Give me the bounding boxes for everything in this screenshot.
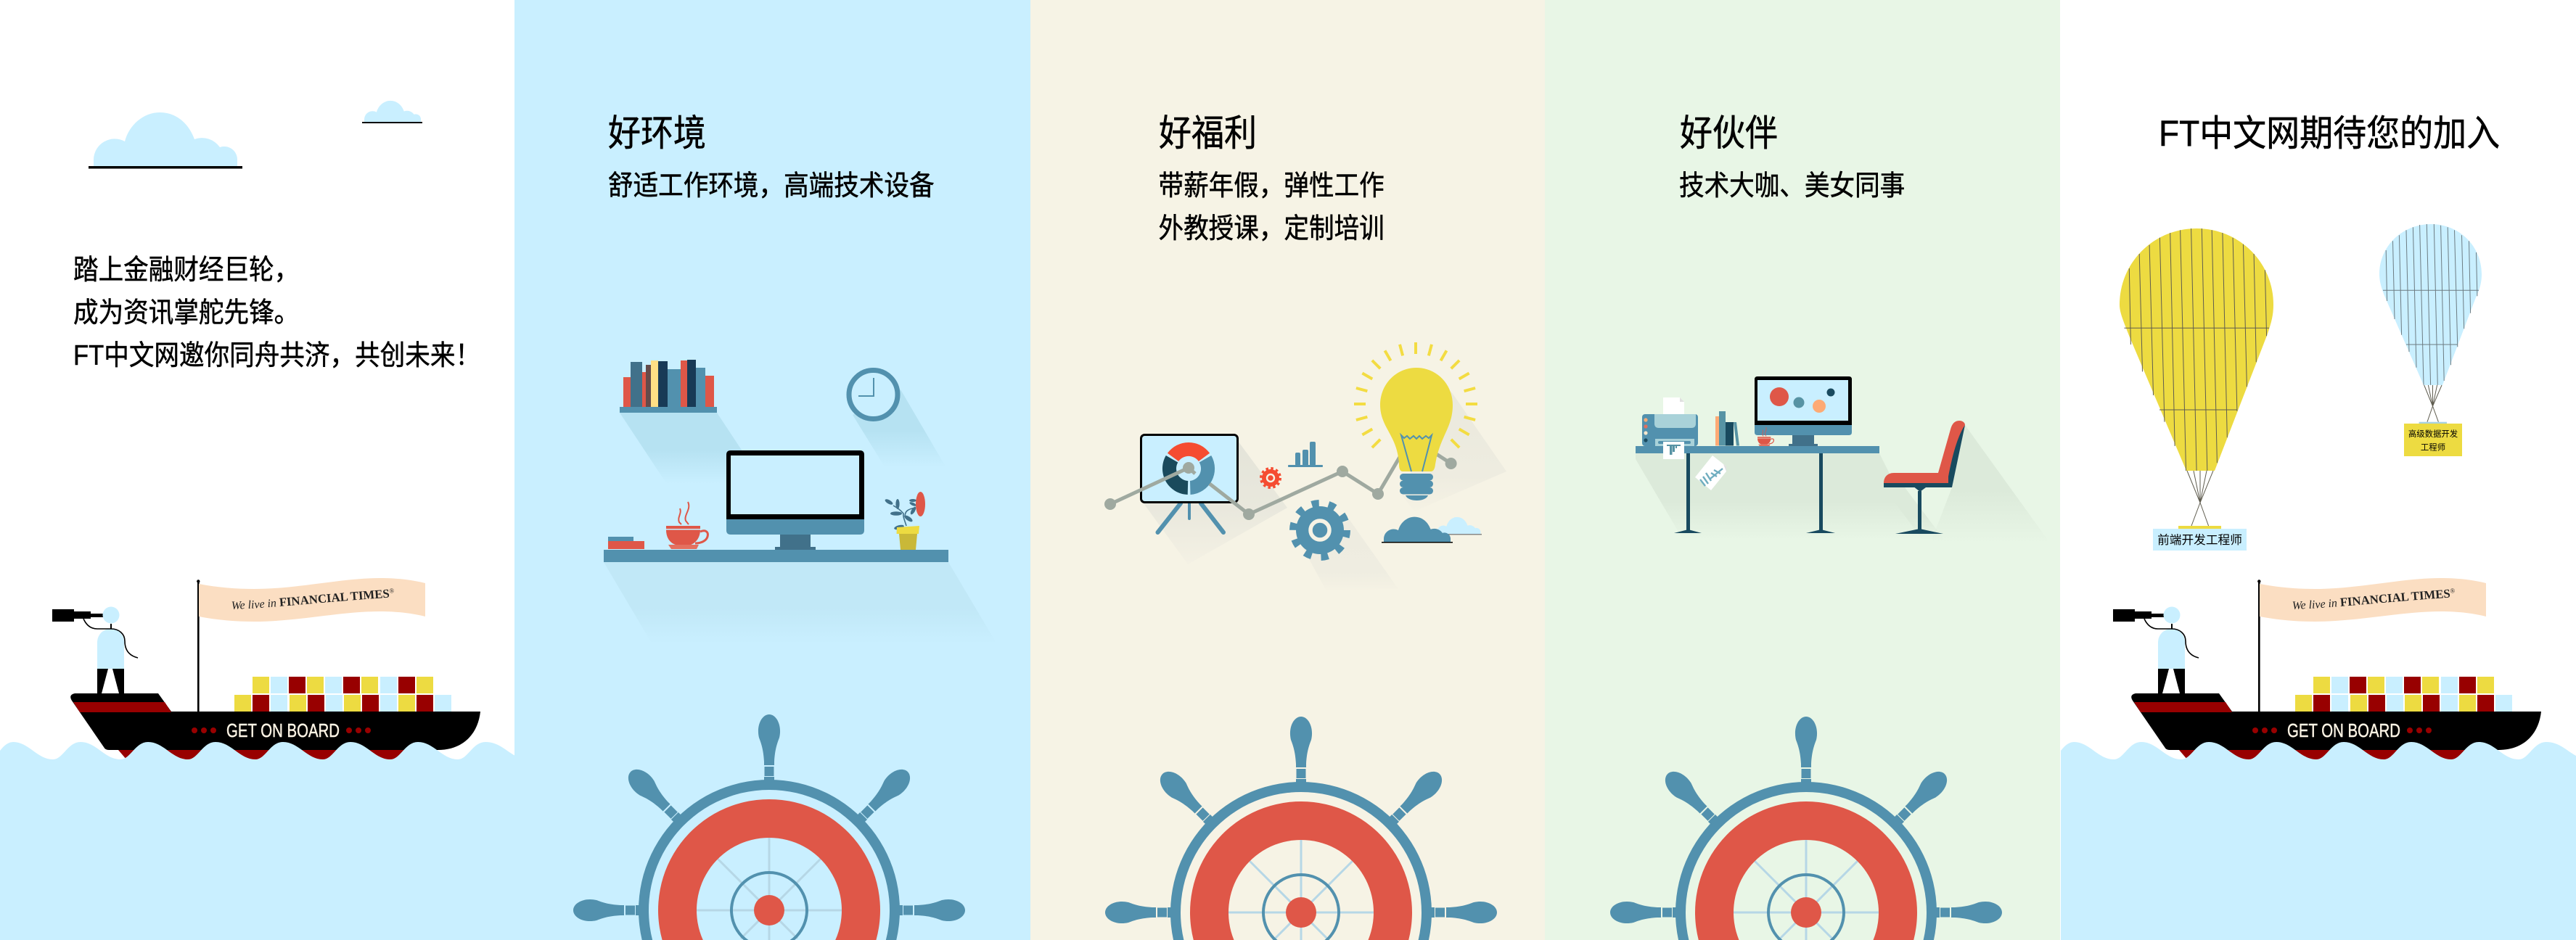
- shadows: [1144, 392, 1506, 590]
- panel: join us: [2061, 113, 2576, 940]
- label: senior data engineer: 工程师: [2421, 442, 2445, 453]
- panel: good benefits: [1030, 0, 1545, 940]
- icon: office chair: [1884, 421, 1965, 534]
- flag banner: [199, 578, 425, 622]
- flag banner: ®: [389, 588, 394, 593]
- ship hull: GET ON BOARD: [226, 720, 340, 741]
- heading: 好环境: [608, 114, 706, 154]
- icon: small red gear: [1261, 469, 1280, 487]
- icon: large teal gear: [1293, 503, 1347, 557]
- text block: invitation: FT中文网邀你同舟共济，共创未来！: [73, 339, 480, 371]
- icon: lookout with telescope: [52, 606, 138, 693]
- subtitle: 带薪年假，弹性工作: [1158, 170, 1385, 201]
- shadows: [604, 389, 998, 646]
- cargo containers: [234, 677, 451, 712]
- label: senior data engineer: 高级数据开发: [2408, 429, 2458, 439]
- subtitle: [1158, 170, 1385, 244]
- heading: 好伙伴: [1680, 114, 1778, 154]
- illustration: cargo ship with lookout: [52, 578, 480, 759]
- sea waves: [0, 742, 515, 940]
- subtitle: 外教授课，定制培训: [1158, 213, 1385, 244]
- panel: good environment: [514, 0, 1030, 940]
- icon: wall clock: [849, 370, 898, 419]
- icon: bookshelf: [620, 360, 717, 413]
- panel: good partners: [1545, 0, 2060, 940]
- cargo containers: [2295, 677, 2512, 712]
- icon: presentation board with pie chart: [1141, 435, 1238, 502]
- label: senior data engineer: [2404, 424, 2462, 456]
- icon: stacked books: [608, 537, 644, 549]
- icon: ship wheel: [1610, 717, 2002, 940]
- icon: ship wheel: [573, 714, 965, 940]
- icon: presentation tripod: [1158, 503, 1223, 532]
- icon: small coffee cup: [1757, 427, 1773, 446]
- icon: ship wheel: [1105, 717, 1497, 940]
- heading: 好福利: [1159, 114, 1257, 154]
- subtitle: 舒适工作环境，高端技术设备: [608, 170, 935, 201]
- icon: light bulb: [1354, 342, 1477, 500]
- icon: falling paper: [1695, 455, 1726, 490]
- desk: [1636, 446, 1879, 533]
- ship hull: [70, 693, 480, 760]
- panel: intro: [0, 100, 514, 940]
- flag banner: We live in FINANCIAL TIMES: [232, 589, 389, 609]
- flag banner: ®: [2450, 588, 2455, 593]
- text block: invitation: 踏上金融财经巨轮，: [73, 254, 299, 285]
- text block: invitation: 成为资讯掌舵先锋。: [73, 297, 299, 328]
- ship hull: GET ON BOARD: [2287, 720, 2400, 741]
- icon: monitor with dots: [1755, 376, 1852, 446]
- icon: printer: [1642, 397, 1698, 459]
- icon: mini bar chart: [1288, 442, 1323, 467]
- label: front-end engineer: [2153, 529, 2247, 551]
- sea waves: [2061, 742, 2576, 940]
- icon: mast: [2257, 580, 2261, 712]
- icon: pair of clouds: [1382, 517, 1482, 543]
- flag banner: We live in FINANCIAL TIMES: [2293, 589, 2450, 609]
- icon: lookout with telescope: [2113, 606, 2199, 693]
- shadows: [1636, 425, 2051, 544]
- heading: FT中文网期待您的加入: [2159, 113, 2500, 154]
- icon: coffee cup: [666, 502, 707, 549]
- label: front-end engineer: 前端开发工程师: [2157, 533, 2242, 547]
- flag banner: [2260, 578, 2486, 622]
- illustration: cargo ship with lookout: [2113, 578, 2541, 759]
- subtitle: 技术大咖、美女同事: [1679, 170, 1905, 201]
- icon: potted flower: [885, 492, 925, 550]
- icon: yellow balloon: [2120, 228, 2273, 551]
- icon: desk books: [1715, 411, 1739, 445]
- icon: small cloud: [362, 101, 422, 123]
- icon: desktop monitor: [726, 450, 864, 550]
- icon: blue balloon: [2379, 224, 2482, 456]
- icon: mast: [197, 580, 200, 712]
- desk shelf: [604, 550, 948, 562]
- text block: invitation: [73, 254, 480, 371]
- line chart: [1104, 453, 1457, 520]
- icon: bulb rays: [1354, 342, 1477, 448]
- icon: large cloud: [89, 112, 242, 168]
- ship hull: [2131, 693, 2541, 760]
